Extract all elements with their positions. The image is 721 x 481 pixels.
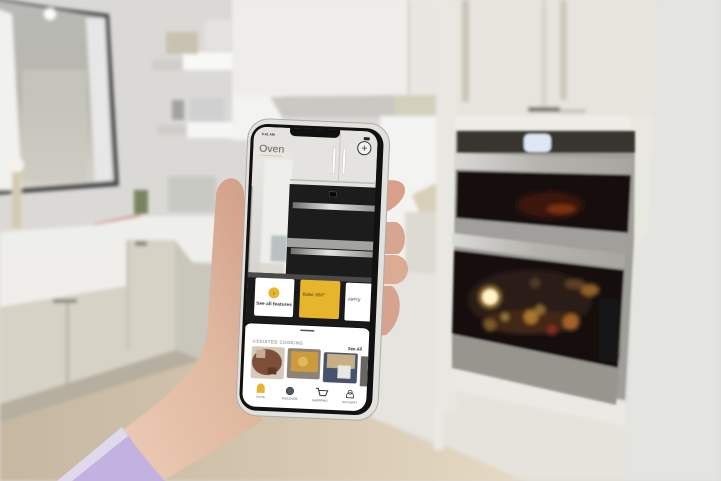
window [0, 0, 119, 195]
bottom tab bar [256, 383, 358, 405]
card: see all features [254, 278, 295, 317]
bottom tab bar: ACCOUNT [342, 400, 357, 405]
oven [452, 131, 635, 405]
notch [290, 128, 340, 138]
upper oven handle [454, 153, 632, 174]
section heading: ASSISTED COOKING [253, 338, 303, 346]
lower oven handle [452, 233, 625, 268]
lower cabinets under counter [372, 268, 628, 481]
sleeve [57, 427, 165, 481]
card: see all features: › [272, 288, 276, 297]
screen oven handles [293, 202, 377, 212]
status time: 9:41 AM [262, 132, 275, 137]
see all link: See All [348, 346, 362, 352]
fingers [380, 180, 405, 213]
phone frame [236, 118, 390, 421]
screen left backsplash [246, 150, 293, 322]
screen oven display [329, 192, 336, 197]
faucet and plant [10, 158, 148, 240]
home icon [257, 383, 265, 393]
hand palm and wrist [120, 178, 408, 481]
bottom tab bar: SHOPPING [312, 398, 328, 403]
account icon [346, 390, 354, 398]
status battery [364, 137, 370, 140]
lower oven contents [468, 270, 618, 360]
phone bezel [239, 123, 384, 416]
card: airfry: AirFry [348, 297, 361, 303]
floor [0, 350, 525, 481]
right wall cabinets [436, 0, 721, 481]
phone [236, 118, 390, 421]
upper cabinets centre [232, 0, 450, 276]
oven control panel [457, 131, 635, 153]
discover icon [286, 387, 294, 395]
shopping icon [315, 388, 328, 396]
card: see all features: See all features [256, 301, 292, 308]
bottom tab bar: DISCOVER [282, 396, 298, 401]
assisted cooking sheet [241, 323, 370, 413]
screen oven [286, 184, 376, 278]
oven title: Oven [259, 143, 285, 156]
base cabinets left [0, 240, 215, 404]
lower oven door [452, 250, 624, 368]
oven display [524, 134, 551, 152]
add button: + [361, 143, 368, 155]
screen cabinet handles [332, 148, 336, 174]
card: bake: Bake 350° [303, 292, 325, 299]
recipe photos [250, 346, 369, 387]
oven light [478, 285, 502, 309]
left wall shelves [152, 20, 233, 212]
phone screen [241, 120, 382, 413]
card: airfry [344, 282, 373, 322]
screen upper wall [252, 126, 378, 192]
card: bake [299, 280, 340, 319]
upper oven glow [516, 191, 584, 219]
counter and sink [0, 216, 240, 307]
bottom tab bar: HOME [256, 395, 265, 399]
oven body [452, 131, 635, 400]
oven divider [455, 218, 628, 258]
upper oven door [456, 171, 631, 233]
chevron badge [268, 287, 280, 299]
add button [357, 141, 371, 155]
feature card row backdrop [246, 272, 372, 328]
oven bottom panel [452, 335, 619, 405]
